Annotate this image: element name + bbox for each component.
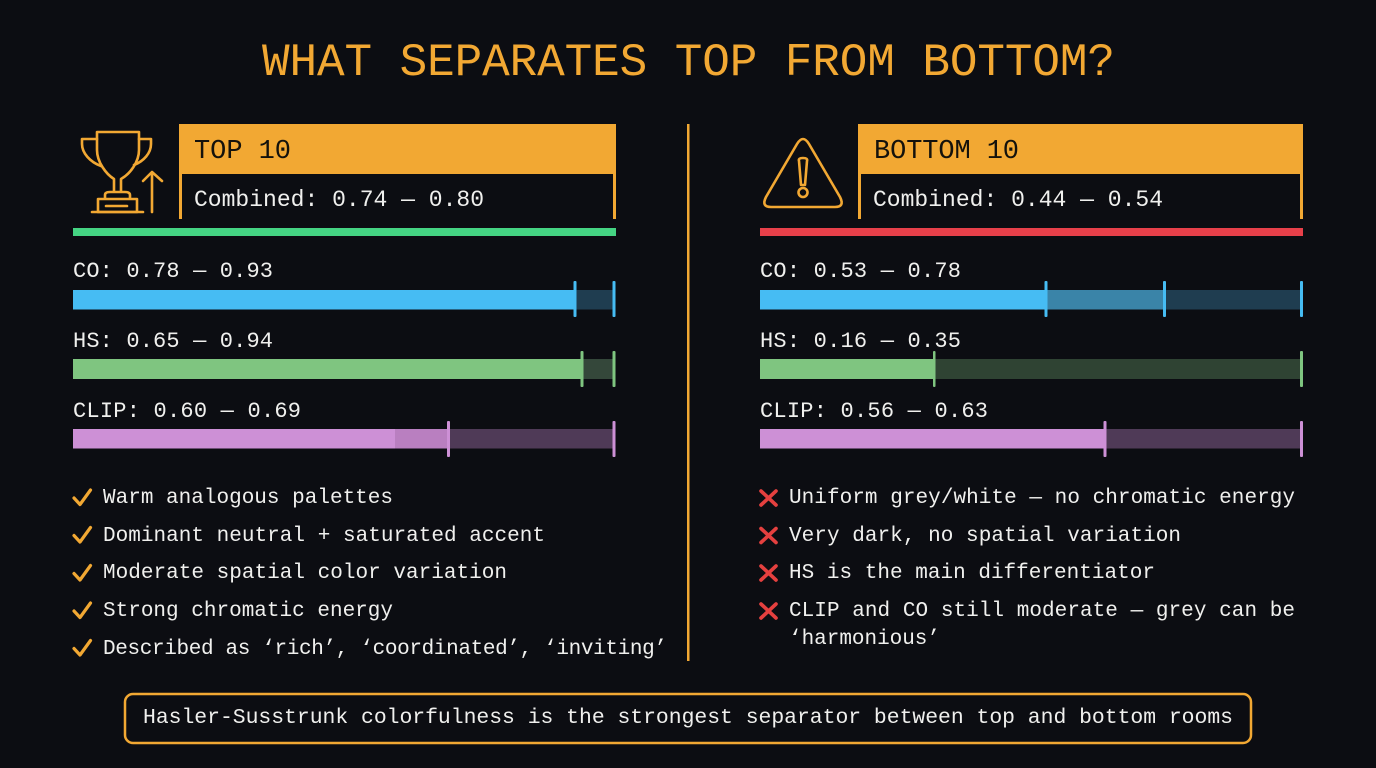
bar: CO bottom <box>760 259 1303 317</box>
red rule <box>760 228 1303 236</box>
callout: Hasler-Susstrunk colorfulness is the strongest separator between top and bottom rooms <box>143 706 1233 730</box>
bar: CLIP bottom: CLIP: 0.56 — 0.63 <box>760 399 988 424</box>
bar: CO bottom: CO: 0.53 — 0.78 <box>760 259 961 284</box>
item: uniform grey: Uniform grey/white — no chromatic energy <box>789 487 1295 510</box>
item: spatial variation: Moderate spatial color variation <box>103 562 507 585</box>
item: warm palettes: Warm analogous palettes <box>103 487 393 510</box>
bar: HS top <box>73 329 616 387</box>
bar: CO top: CO: 0.78 — 0.93 <box>73 259 273 284</box>
bar: CO top <box>73 259 616 317</box>
title: WHAT SEPARATES TOP FROM BOTTOM? <box>262 37 1115 89</box>
item: described as: Described as ‘rich’, ‘coordinated’, ‘inviting’ <box>103 638 667 661</box>
header: top 10: Combined: 0.74 — 0.80 <box>194 187 484 213</box>
panel: top 10 <box>73 124 667 661</box>
icon: trophy with up arrow <box>82 132 162 212</box>
header: top 10: TOP 10 <box>194 137 291 167</box>
bar: CLIP top: CLIP: 0.60 — 0.69 <box>73 399 301 424</box>
callout <box>125 694 1251 743</box>
bar: CLIP bottom <box>760 399 1303 457</box>
item: very dark: Very dark, no spatial variation <box>789 525 1181 548</box>
bar: HS top: HS: 0.65 — 0.94 <box>73 329 273 354</box>
bar: CLIP top <box>73 399 616 457</box>
item: HS differentiator: HS is the main differentiator <box>789 562 1155 585</box>
header: bottom 10: BOTTOM 10 <box>874 137 1019 167</box>
header: bottom 10: Combined: 0.44 — 0.54 <box>873 187 1163 213</box>
item: dominant neutral: Dominant neutral + saturated accent <box>103 525 545 548</box>
header: top 10 <box>179 124 616 219</box>
center divider <box>687 124 690 661</box>
list: bottom traits <box>761 487 1295 651</box>
item: chromatic energy: Strong chromatic energy <box>103 600 393 623</box>
list: top traits <box>74 487 667 661</box>
bar: HS bottom <box>760 329 1303 387</box>
panel: bottom 10 <box>760 124 1303 651</box>
header: bottom 10 <box>858 124 1303 219</box>
green rule <box>73 228 616 236</box>
item: CLIP and CO: CLIP and CO still moderate — grey can be <box>789 600 1295 623</box>
icon: warning triangle <box>764 139 842 207</box>
item: CLIP and CO: ‘harmonious’ <box>789 628 940 651</box>
bar: HS bottom: HS: 0.16 — 0.35 <box>760 329 961 354</box>
item: CLIP and CO <box>761 600 1295 651</box>
